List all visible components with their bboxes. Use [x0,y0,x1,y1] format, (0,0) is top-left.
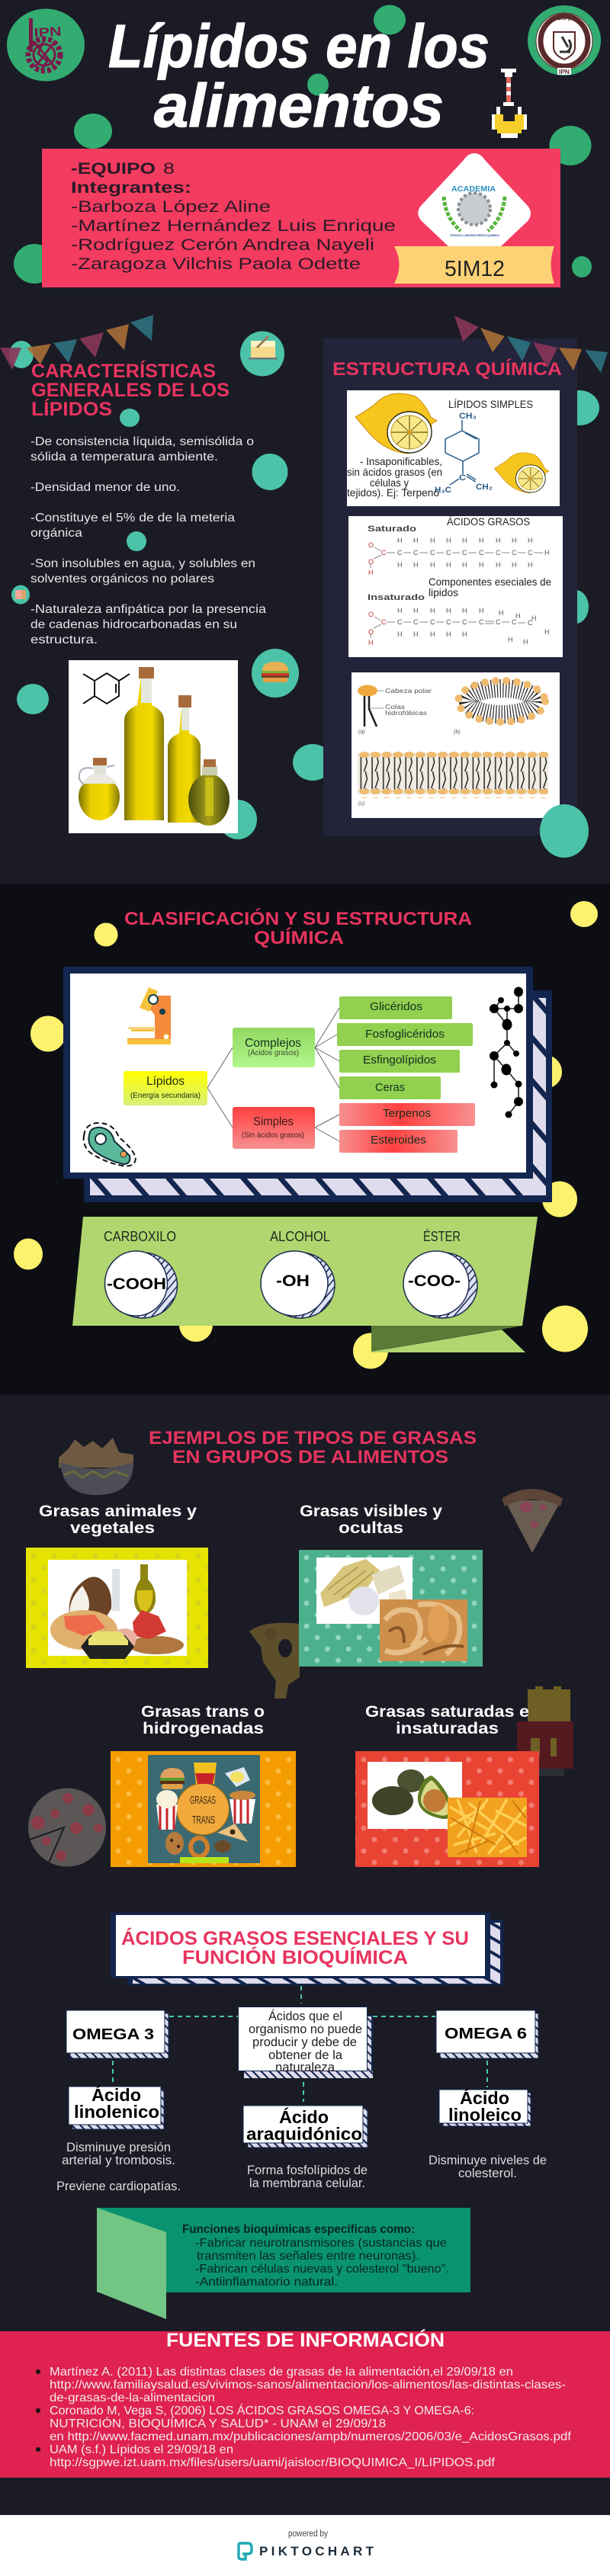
heading: características generales [31,360,230,420]
unsaturated chain: H [413,630,418,638]
background: top section [0,0,610,884]
medium bottle [168,707,201,823]
icon: chips bowl [59,1438,133,1495]
bunting right [454,316,608,373]
image: lípidos simples: C [459,473,466,483]
box: omega 3: OMEGA 3 [72,2026,154,2043]
box: ácido linoleico [439,2087,531,2126]
box: glicéridos [339,996,452,1019]
unsaturated chain: H [515,612,520,620]
heading: clasificación [124,908,472,948]
background: classification section [0,884,610,1394]
box: ácido linolénico [69,2084,164,2129]
saturated chain: H [544,549,549,557]
ribbon: group 5IM12: 5IM12 [445,257,505,281]
unsaturated chain: H [523,638,528,646]
banner: funciones bioquímicas [97,2208,470,2319]
text block: características: orgánica [30,527,82,540]
team text [71,160,396,273]
text block: características: -Naturaleza anfipática por la presencia [30,603,266,616]
saturated chain: H [430,537,435,544]
frame: ácidos grasos title: ÁCIDOS GRASOS ESENCIALES Y SU [121,1927,469,1949]
round bottle [188,774,230,826]
chicharrón [380,1599,467,1661]
card: visible and hidden fats [299,1550,483,1667]
image: lípidos simples: células y [370,476,409,489]
box: ácido araquidónico: araquidónico [246,2124,362,2144]
box: definición: Ácidos que el [268,2009,342,2023]
unsaturated chain: C [479,618,484,626]
image: lipid membrane structures: Cabeza polar [385,688,432,695]
saturated chain: H [496,537,500,544]
butter [81,1635,134,1659]
box: definición: obtener de la [268,2048,343,2062]
text block: características [30,435,266,646]
banner: funciones bioquímicas: -Antiinflamatorio natural. [195,2276,338,2289]
box: omega 6 [436,2010,538,2058]
ribbon: functional groups [72,1217,538,1352]
lemon small [494,453,549,493]
unsaturated chain: H [462,630,467,638]
box: lípidos: (Energía secundaria) [130,1091,201,1100]
footer: piktochart logo: PIKTOCHART [259,2544,374,2558]
banner: funciones bioquímicas: transmiten las señales entre neuronas). [197,2250,419,2263]
unsaturated chain: H [397,607,403,614]
saturated chain: C [397,549,403,557]
burger [160,1768,185,1778]
unsaturated chain: O [368,628,374,636]
icon: pixel fries [517,1686,573,1776]
saturated chain: C [413,549,419,557]
icon: small food in circle [11,585,30,604]
green tag [180,1857,229,1863]
saturated chain: H [446,561,451,569]
icon: cheese [249,1623,300,1699]
box: esfingolípidos [339,1050,460,1073]
unsaturated chain: C [512,618,517,626]
text block: características: solventes orgánicos no polares [30,573,214,585]
image: ácidos grasos [348,515,563,657]
saturated chain: H [528,537,532,544]
teal dots left column [9,341,599,839]
team text: -Rodríguez Cerón Andrea Nayeli [71,236,374,254]
text block: características: -Son insolubles en agua, y solubles en [30,557,255,570]
saturated chain: H [446,537,451,544]
text: araquidónico effects: Forma fosfolípidos de [247,2164,368,2177]
text block: características: -De consistencia líquida, semisólida o [30,435,254,448]
icon: CECyT school crest: C.E.C y T. [552,16,576,21]
box: ceras: Ceras [375,1081,405,1094]
icon: IPN logo [7,9,85,81]
labels [104,1229,461,1244]
coin: alcohol: -OH [276,1272,310,1290]
image: lipid membrane structures: (b) [454,730,461,735]
image: ácidos grasos: Saturado [368,525,416,534]
unsaturated chain: H [544,628,549,636]
salmon [64,1615,105,1636]
connectors [207,1008,339,1141]
box: fosfoglicéridos: Fosfoglicéridos [365,1028,445,1041]
saturated chain: H [413,537,418,544]
box: omega 3 [66,2010,169,2058]
icon: academy badge: TECNICO LABORATORISTA QUIMICO [450,233,499,237]
box: lípidos: Lípidos [146,1075,185,1088]
box: terpenos: Terpenos [383,1107,431,1120]
saturated chain: H [479,561,483,569]
icon: academy badge [418,153,531,248]
box: esteroides: Esteroides [371,1134,426,1147]
jug [79,773,120,820]
saturated chain: C [381,549,387,557]
unsaturated chain: H [508,636,512,643]
tall bottle [124,677,164,820]
icon: pizza slice [502,1489,563,1553]
text: araquidónico effects [247,2164,368,2190]
box: terpenos [339,1103,475,1126]
saturated chain: H [496,561,500,569]
labels: ALCOHOL [270,1229,330,1244]
heading: ejemplos de grasas [149,1428,477,1468]
unsaturated chain: C [462,618,467,626]
unsaturated chain: C [528,619,533,627]
unsaturated chain: H [531,614,537,622]
subheading: animales y vegetales: Grasas animales y [39,1503,197,1520]
coin: éster [403,1251,477,1318]
subheading: saturadas [365,1703,529,1737]
coin: éster: -COO- [408,1272,461,1290]
saturated chain: H [462,537,467,544]
heading: clasificación: QUÍMICA [254,927,344,948]
dashed connectors [113,1986,487,2102]
labels: ÉSTER [423,1229,461,1244]
unsaturated chain: H [430,607,435,614]
box: simples: (Sin ácidos grasos) [242,1131,304,1140]
subheading: animales y vegetales [39,1503,197,1537]
header decorative green dots [14,5,592,284]
icon: molecule [490,986,523,1118]
unsaturated chain [368,607,549,646]
panel: team members [42,149,560,287]
icon: CECyT school crest: IPN [559,69,570,75]
saturated chain: H [512,561,517,569]
image: ácidos grasos: ÁCIDOS GRASOS [447,515,530,528]
unsaturated chain: H [479,607,483,614]
saturated chain: H [368,569,374,576]
image: lípidos simples: H₃C [435,486,451,495]
text block: características: de cadenas hidrocarbonadas en su [30,618,237,631]
panel: fuentes de información: UAM (s.f.) Lípidos el 29/09/18 en [50,2443,233,2456]
subheading: saturadas: Grasas saturadas e [365,1703,529,1721]
image: lípidos simples: - Insaponificables, [360,455,442,467]
text block: características: sólida a temperatura ambiente. [30,451,218,464]
box: simples: Simples [253,1115,294,1128]
unsaturated chain: C [496,618,501,626]
unsaturated chain: O [368,611,374,618]
subheading: visibles y ocultas: Grasas visibles y [300,1503,442,1520]
drink [230,1799,255,1824]
icon: academy badge: ACADEMIA [451,185,496,194]
unsaturated chain: C [381,618,387,626]
limonene [445,420,479,485]
cookie, ring, donut, pizza [165,1832,184,1855]
heading: características generales: CARACTERÍSTICAS [31,360,216,382]
banner: funciones bioquímicas: -Fabrican células nuevas y colesterol "bueno". [195,2263,449,2276]
team text: 8 [163,160,175,178]
lard [348,1586,379,1615]
saturated chain: C [512,549,517,557]
image: lípidos simples: tejidos). Ej: Terpeno [347,486,439,499]
panel: classification diagram [63,967,552,1202]
image: lípidos simples [347,390,560,506]
icon: pizza [27,1788,106,1866]
image: ácidos grasos: Insaturado [368,593,425,602]
beef [133,1610,166,1639]
panel: fuentes de información: http://www.familiaysalud.es/vivimos-sanos/alimentacion/los-alimentos/las-distintas-clases- [50,2379,566,2392]
icon: burger in circle [252,649,299,698]
text: omega 3 effects: arterial y trombosis. [62,2154,175,2167]
subheading: visibles y ocultas [300,1503,442,1537]
team text: -EQUIPO [71,160,156,178]
title [108,12,490,140]
team text: Integrantes: [71,179,191,197]
wood boards [50,1610,117,1650]
saturated chain: H [397,561,403,569]
saturated chain: C [479,549,484,557]
saturated chain: H [413,561,418,569]
icon: cell [84,1123,136,1166]
text: omega 6 effects: Disminuye niveles de [429,2154,547,2167]
teal dot bottom right [540,804,589,858]
central label: TRANS [192,1814,215,1827]
unsaturated chain: C [446,618,451,626]
central label: GRASAS [190,1794,216,1807]
image: oil bottles and molecule [69,660,238,833]
avocados [397,1769,425,1792]
saturated chain: C [528,549,533,557]
icon: IPN logo: IPN [34,24,62,40]
unsaturated chain: C [430,618,435,626]
text: omega 3 effects: Disminuye presión [66,2141,171,2154]
team text: -Martínez Hernández Luis Enrique [71,217,396,235]
heading: ejemplos de grasas: EN GRUPOS DE ALIMENTOS [172,1447,448,1468]
unsaturated chain: H [397,630,403,638]
saturated chain: H [430,561,435,569]
panel: fuentes de información [0,2328,610,2478]
image: lípidos simples: CH₂ [476,483,493,492]
box: esteroides [339,1130,458,1153]
saturated chain: H [479,537,483,544]
image: lipid membrane structures: hidrofóbicas [385,710,427,717]
ribbon: group 5IM12 [394,246,554,284]
box: ácido linoleico: Ácido [460,2087,509,2108]
unsaturated chain: H [430,630,435,638]
butter [225,1767,250,1787]
box: ácido araquidónico: Ácido [279,2106,329,2127]
heading: ejemplos de grasas: EJEMPLOS DE TIPOS DE GRASAS [149,1428,477,1448]
title: Lípidos en los [108,12,490,80]
frame: ácidos grasos title [111,1913,503,1985]
box: complejos: (Ácidos grasos) [248,1047,299,1057]
box: lípidos [124,1071,207,1105]
saturated chain: H [462,561,467,569]
saturated chain: C [446,549,451,557]
image: lípidos simples: CH₃ [459,412,477,421]
box: definición [238,2007,373,2078]
text block: características: -Constituye el 5% de de la meteria [30,512,235,525]
heading: estructura química: ESTRUCTURA QUÍMICA [332,358,562,380]
subheading: trans: Grasas trans o [141,1703,265,1721]
background: footer [0,2515,610,2576]
box: glicéridos: Glicéridos [370,1000,422,1013]
unsaturated chain: C [397,618,403,626]
box: esfingolípidos: Esfingolípidos [363,1054,436,1067]
text block: características: estructura. [30,634,98,646]
frame: ácidos grasos title: FUNCIÓN BIOQUÍMICA [182,1946,408,1968]
butter block [371,1565,404,1595]
saturated chain: C [496,549,501,557]
bilayer [358,753,548,794]
box: omega 6: OMEGA 6 [445,2026,527,2042]
image: ácidos grasos: Componentes eseciales de [429,576,551,588]
unsaturated chain: C [413,618,419,626]
micelle [468,688,535,714]
subheading: visibles y ocultas: ocultas [339,1519,403,1537]
text: araquidónico effects: la membrana celular. [249,2177,365,2190]
pasta [320,1559,380,1607]
box: ceras [339,1076,441,1099]
panel: estructura química [323,338,577,836]
panel: fuentes de información: Martínez A. (2011) Las distintas clases de grasas de la alimentación,el 29/09/18 en [50,2366,513,2379]
panel: fuentes de información: NUTRICIÓN, BIOQUÍMICA Y SALUD* - UNAM el 29/09/18 [50,2416,386,2430]
lemon large [355,393,437,454]
saturated chain: O [368,558,374,566]
card: animal and vegetable fats [26,1548,208,1668]
saturated chain: O [368,541,374,549]
heading: características generales: GENERALES DE LOS [31,380,230,401]
subheading: saturadas: insaturadas [396,1720,499,1737]
text: omega 6 effects: colesterol. [458,2167,517,2180]
box: simples [233,1107,315,1149]
saturated chain [368,537,549,576]
text: omega 6 effects [429,2154,547,2180]
text block: características: -Densidad menor de uno. [30,481,180,494]
box: definición: producir y debe de [252,2035,357,2049]
icon: pixel flask [492,69,527,138]
text: omega 3 effects: Previene cardiopatías. [56,2180,181,2193]
yellow decorative dots [14,901,598,1369]
saturated chain: H [512,537,517,544]
panel: fuentes de información: FUENTES DE INFORMACIÓN [166,2328,445,2351]
box: ácido linolénico: Ácido [92,2084,141,2105]
image: lípidos simples: sin ácidos grasos (en [347,466,442,478]
saturated chain: H [528,561,532,569]
phospholipid [358,685,377,697]
saturated chain: C [462,549,467,557]
saturated chain: H [397,537,403,544]
image: lipid membrane structures: (a) [358,730,365,735]
box: ácido linoleico: linoleico [448,2105,522,2125]
bunting left [0,315,153,370]
unsaturated chain: H [446,630,451,638]
subheading: trans [141,1703,265,1737]
box: complejos: Complejos [245,1037,301,1050]
coin: alcohol [261,1251,335,1318]
text: omega 3 effects [56,2141,181,2193]
panel: fuentes de información: http://sgpwe.izt.uam.mx/files/users/uami/jaislocr/BIOQUIMICA_I/LIPIDOS.pdf [50,2456,496,2469]
subheading: animales y vegetales: vegetales [70,1519,155,1537]
box: ácido araquidónico [243,2106,368,2148]
coin: carboxilo: -COOH [107,1275,166,1293]
card: trans fats [111,1751,296,1867]
box: ácido linolénico: linolenico [74,2102,159,2122]
image: lipid membrane structures: Colas [385,704,405,711]
fries [194,1763,217,1784]
icon: CECyT school crest [528,5,601,75]
team text: -Barboza López Aline [71,198,271,216]
subheading: trans: hidrogenadas [143,1720,264,1737]
saturated chain: C [430,549,435,557]
unsaturated chain: H [413,607,418,614]
unsaturated chain: H [446,607,451,614]
unsaturated chain: H [368,639,374,646]
popcorn [156,1804,178,1830]
heading: clasificación: CLASIFICACIÓN Y SU ESTRUCTURA [124,908,472,929]
background: lower section [0,1394,610,2515]
panel: fuentes de información: Coronado M, Vega S, (2006) LOS ÁCIDOS GRASOS OMEGA-3 Y OMEGA-6: [50,2403,474,2417]
box: fosfoglicéridos [337,1023,473,1046]
icon: butter in circle [240,331,284,377]
box: complejos [233,1028,315,1067]
icon: microscope [127,987,171,1044]
footer: piktochart logo: powered by [288,2529,328,2539]
heading: características generales: LÍPIDOS [31,398,112,420]
banner: funciones bioquímicas: -Fabricar neurotransmisores (sustancias que [195,2237,447,2250]
box: definición: organismo no puede [249,2023,362,2036]
card: saturated and unsaturated [355,1751,539,1867]
image: ácidos grasos: lipidos [429,586,458,598]
title: alimentos [154,72,444,140]
panel: fuentes de información: de-grasas-de-la-alimentacion [50,2392,215,2404]
labels: CARBOXILO [104,1229,176,1244]
image: lipid membrane structures: (c) [358,801,364,807]
team text: -Zaragoza Vilchis Paola Odette [71,255,361,273]
molecule [83,673,130,704]
image: lipid membrane structures [352,672,560,818]
coin: carboxilo [105,1251,177,1318]
fries [448,1798,527,1857]
image: lípidos simples: LÍPIDOS SIMPLES [448,398,533,410]
footer: piktochart logo [239,2529,374,2559]
box: definición: naturaleza [275,2061,336,2074]
banner: funciones bioquímicas: Funciones bioquímicas específicas como: [182,2223,415,2236]
central label [177,1783,229,1835]
coconut [69,1577,111,1620]
panel: fuentes de información: en http://www.facmed.unam.mx/publicaciones/ampb/numeros/2006/03/e_AcidosGrasos.pdf [50,2430,572,2443]
unsaturated chain: H [462,607,467,614]
unsaturated chain: H [499,609,503,617]
bottle [112,1569,120,1611]
